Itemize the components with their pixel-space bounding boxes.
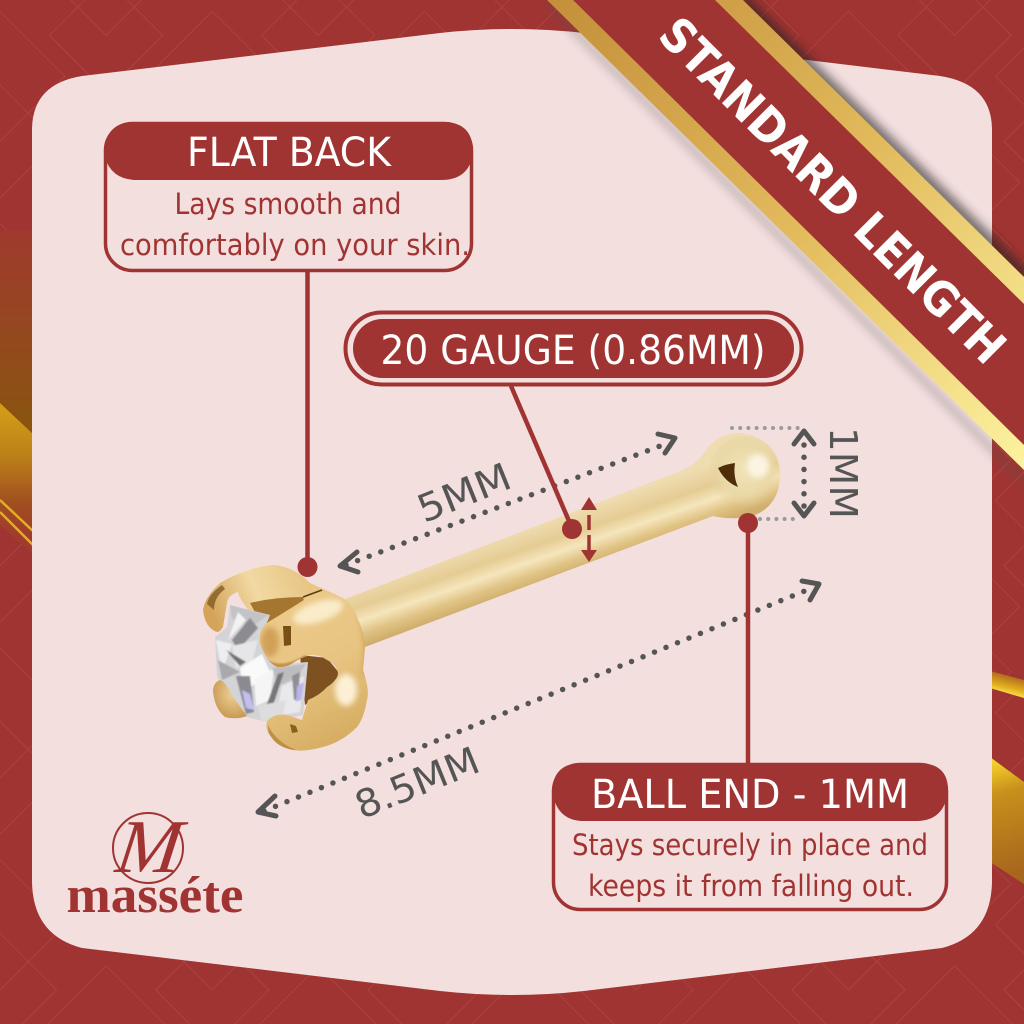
setting back prong (203, 565, 330, 632)
ribbon: standard length (545, 0, 1024, 486)
description: Stays securely in place and (572, 828, 928, 862)
heading: 20 GAUGE (0.86MM) (380, 328, 766, 374)
seam line (303, 590, 322, 597)
callout: flat back (104, 122, 473, 577)
lower left prong (213, 680, 247, 718)
leader line (298, 272, 318, 577)
gold sweep right (990, 671, 1024, 884)
callout: ball end (552, 513, 948, 910)
logo: massete (66, 804, 244, 924)
callout: flat back: comfortably on your skin. (120, 228, 470, 262)
label: 5mm: 5MM (411, 454, 517, 532)
nose stud (203, 433, 781, 755)
wordmark: masséte (66, 867, 244, 924)
dimension: 5mm (340, 434, 675, 572)
gauge arrow (581, 497, 597, 562)
dark opening (300, 655, 340, 705)
label: 8.5mm: 8.5MM (349, 738, 486, 828)
heading: FLAT BACK (187, 130, 393, 176)
heading: BALL END - 1MM (591, 772, 909, 818)
gold sweep left (0, 230, 34, 555)
pin shaft and ball (345, 433, 781, 647)
description: Lays smooth and (174, 187, 402, 221)
diamond stone (215, 605, 308, 722)
leader line (511, 386, 582, 539)
callout: 20 gauge (346, 312, 802, 539)
leader line (738, 513, 758, 764)
logo mark: M (111, 804, 192, 889)
setting body and front prong (260, 592, 368, 751)
inner setting recess (250, 597, 310, 625)
label: 1mm: 1MM (821, 427, 865, 519)
callout: ball end: keeps it from falling out. (588, 869, 914, 903)
dimension: 8.5mm (258, 581, 819, 828)
dimension: 1mm (732, 427, 865, 519)
